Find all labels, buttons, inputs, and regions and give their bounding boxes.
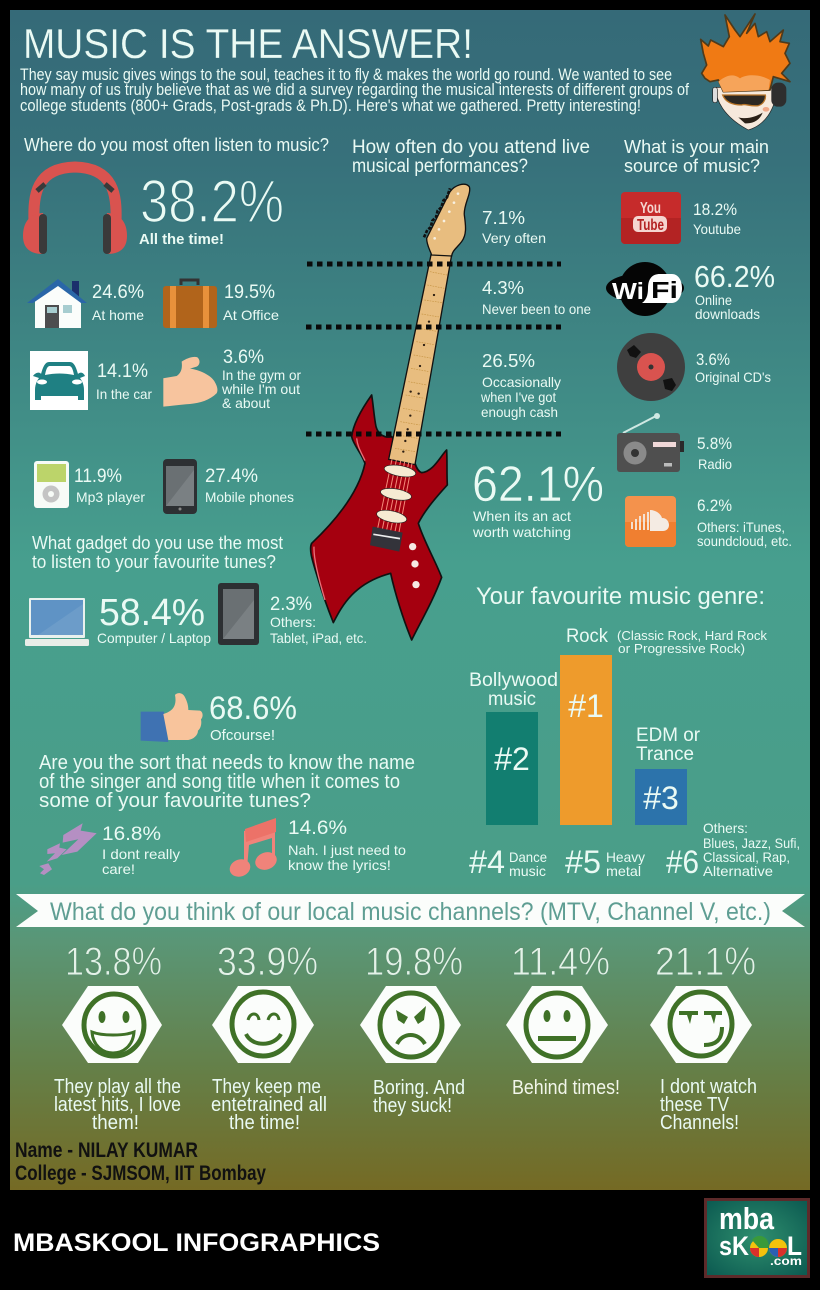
stat: youtube: 18.2% — [693, 200, 737, 219]
stat: original cds: Original CD's — [695, 369, 771, 385]
stat: very often: Very often — [482, 230, 546, 246]
caption: play latest hits: latest hits, I love — [54, 1094, 181, 1116]
bar: rock #1: Rock — [566, 626, 608, 647]
icon: happy face in hexagon — [212, 986, 314, 1063]
bar chart: genres — [469, 626, 767, 825]
stat: mobile phones — [205, 466, 294, 505]
icon: briefcase — [163, 280, 217, 328]
bar: rock #1: #1 — [568, 688, 604, 724]
bar: bollywood #2: music — [488, 689, 536, 710]
stat: don't care: 16.8% — [102, 824, 161, 845]
heading: singer and song question — [39, 752, 415, 812]
stat: worth watching: When its an act — [473, 508, 571, 524]
stat: original cds: 3.6% — [696, 350, 730, 369]
stat: very often: 7.1% — [482, 208, 525, 228]
percentages row: 33.9% — [217, 940, 318, 984]
icon: flame-haired character with headphones — [701, 14, 790, 130]
stat: don't care: I dont really — [102, 846, 180, 862]
caption: behind times: Behind times! — [512, 1077, 620, 1099]
genre #5 heavy metal: metal — [606, 863, 641, 879]
title: MUSIC IS THE ANSWER! — [23, 20, 473, 67]
icon: smirking face in hexagon — [650, 986, 752, 1063]
stat: at office — [223, 282, 279, 323]
icon: radio — [617, 413, 684, 472]
genre #6 others: Blues, Jazz, Sufi, — [703, 835, 800, 851]
stat: just lyrics — [288, 818, 406, 873]
caption: play latest hits — [54, 1076, 181, 1134]
stat: others itunes: soundcloud, etc. — [697, 533, 792, 549]
stat: occasionally — [480, 351, 561, 420]
stat: radio: Radio — [698, 456, 732, 472]
icon: neutral face in hexagon — [506, 986, 608, 1063]
icon: tablet — [218, 583, 259, 645]
caption: don't watch: Channels! — [660, 1112, 739, 1134]
heading: gadget: What gadget do you use the most — [32, 533, 283, 553]
genre #6 others — [666, 820, 800, 880]
caption: keep me entertained: They keep me — [212, 1076, 321, 1098]
stat: of course: 68.6% — [209, 690, 297, 726]
stat: others tablet: 2.3% — [270, 594, 312, 615]
stat: worth watching: 62.1% — [472, 456, 604, 512]
logo: mbaskool: .com — [770, 1254, 802, 1268]
icon: vinyl record — [617, 333, 685, 401]
icon: soundcloud — [625, 496, 676, 547]
stat: mobile phones: 27.4% — [205, 466, 258, 487]
stat: don't care: care! — [102, 861, 135, 877]
guitar headstock — [427, 184, 470, 256]
icon: sleeping zzz — [39, 823, 97, 875]
stat: never been — [482, 278, 591, 317]
stat: online downloads: downloads — [695, 306, 760, 322]
genre #6 others: Others: — [703, 820, 748, 836]
genre #6 others: Classical, Rap, — [703, 849, 790, 865]
icon: angry face in hexagon — [360, 986, 461, 1063]
stat: in the car: 14.1% — [97, 361, 148, 382]
genre #4 dance: Dance — [509, 849, 547, 865]
stat: all the time: All the time! — [139, 231, 224, 248]
stat: mp3 player: Mp3 player — [76, 489, 145, 505]
stat: online downloads — [694, 259, 775, 322]
caption: boring — [373, 1077, 465, 1117]
icon: youtube: You — [640, 200, 661, 217]
stat: at office: 19.5% — [224, 282, 275, 303]
genre #5 heavy metal: Heavy — [606, 849, 645, 865]
icon: thumbs up — [141, 693, 203, 742]
stat: all the time: 38.2% — [140, 168, 284, 235]
stat: worth watching: worth watching — [472, 524, 571, 540]
icon: laptop — [25, 598, 89, 646]
stat: gym: while I'm out — [221, 381, 300, 397]
stat: gym: & about — [222, 395, 270, 411]
stat: very often — [482, 208, 546, 246]
stat: radio — [697, 434, 732, 472]
stat: mp3 player: 11.9% — [74, 466, 122, 487]
stat: occasionally: when I've got — [480, 389, 556, 405]
credit: author — [15, 1139, 266, 1185]
icon: wifi — [606, 262, 684, 316]
bar: edm #3 — [635, 725, 701, 825]
stat: computer laptop: Computer / Laptop — [97, 630, 211, 646]
bar: bollywood #2: Bollywood — [469, 670, 558, 691]
stat: others itunes: 6.2% — [697, 496, 732, 515]
icon: mobile phone — [163, 459, 197, 514]
intro text — [20, 65, 689, 115]
stat: at home — [92, 282, 144, 323]
stat: of course: Ofcourse! — [210, 727, 275, 744]
logo: mbaskool: L — [787, 1231, 802, 1261]
stat: original cds — [695, 350, 771, 385]
icon: headphones — [23, 167, 127, 254]
icon: wifi: Fi — [651, 277, 678, 303]
stat: occasionally: 26.5% — [482, 351, 535, 371]
percentages row: 13.8% — [65, 940, 162, 984]
stat: others itunes — [697, 496, 792, 549]
heading: favourite genre: Your favourite music genre: — [476, 583, 765, 610]
icon: mp3 player — [34, 461, 69, 508]
guitar pickups — [375, 463, 417, 525]
heading: source of music: What is your main — [624, 137, 769, 157]
heading: where do you listen: Where do you most often listen to music? — [24, 135, 329, 155]
caption: boring: Boring. And — [373, 1077, 465, 1099]
stat: online downloads: Online — [695, 292, 732, 308]
stat: others tablet: Tablet, iPad, etc. — [270, 630, 367, 646]
stat: youtube — [693, 200, 741, 237]
percentages row: 21.1% — [655, 940, 756, 984]
stat: youtube: Youtube — [693, 221, 741, 237]
dotted dividers — [306, 264, 561, 434]
guitar neck — [389, 253, 452, 465]
stat: occasionally: Occasionally — [482, 374, 561, 390]
guitar knobs — [409, 543, 420, 588]
stat: just lyrics: know the lyrics! — [288, 857, 391, 873]
stat: of course — [209, 690, 297, 744]
credit: author: College - SJMSOM, IIT Bombay — [15, 1162, 266, 1185]
stat: at home: 24.6% — [92, 282, 144, 303]
stat: don't care — [102, 824, 180, 877]
caption: play latest hits: They play all the — [54, 1076, 181, 1098]
icon: youtube — [621, 192, 681, 244]
heading: live performances: musical performances? — [352, 156, 528, 177]
percentages row: 11.4% — [511, 940, 610, 984]
intro text: college students (800+ Grads, Post-grads & Ph.D). Here's what we gathered. Pretty interesting! — [20, 96, 641, 115]
stat: never been: 4.3% — [482, 278, 524, 298]
caption: keep me entertained: the time! — [229, 1112, 300, 1134]
genre #4 dance — [469, 844, 547, 880]
caption: don't watch — [660, 1076, 757, 1134]
bar: edm #3: EDM or — [636, 725, 701, 746]
genre #4 dance: music — [509, 863, 546, 879]
genre #5 heavy metal — [565, 844, 645, 880]
guitar bridge — [370, 527, 403, 552]
stat: at home: At home — [92, 307, 144, 323]
caption: don't watch: these TV — [660, 1094, 730, 1116]
banner: local music channels: What do you think of our local music channels? (MTV, Channel V, etc.) — [50, 898, 771, 926]
intro text: They say music gives wings to the soul, teaches it to fly & makes the world go round. We wanted to see — [20, 65, 672, 84]
heading: live performances — [352, 137, 590, 177]
footer title: MBASKOOL INFOGRAPHICS — [13, 1229, 380, 1257]
bar: bollywood #2 — [469, 670, 558, 825]
icon: wifi: Wi — [612, 278, 644, 304]
intro text: how many of us truly believe that as we did a survey regarding the musical interests of different groups of — [20, 80, 689, 99]
heading: source of music — [624, 137, 769, 176]
stat: just lyrics: Nah. I just need to — [288, 842, 406, 858]
icon: house — [27, 279, 87, 328]
genre #5 heavy metal: #5 — [565, 844, 601, 880]
guitar strings — [377, 459, 412, 534]
logo: mbaskool: sK — [719, 1231, 749, 1261]
caption: keep me entertained — [211, 1076, 327, 1134]
heading: gadget: to listen to your favourite tunes? — [32, 552, 276, 572]
caption: play latest hits: them! — [92, 1112, 139, 1134]
credit: author: Name - NILAY KUMAR — [15, 1139, 198, 1162]
bar: rock #1: (Classic Rock, Hard Rock — [617, 628, 767, 643]
stat: others tablet — [270, 594, 367, 646]
stat: gym: 3.6% — [223, 347, 264, 368]
caption: boring: they suck! — [373, 1095, 452, 1117]
icon: flexed arm — [163, 357, 217, 407]
heading: singer and song question: some of your favourite tunes? — [39, 790, 311, 812]
genre #6 others: Alternative — [703, 863, 773, 879]
bar: edm #3: Trance — [636, 744, 694, 765]
stat: in the car: In the car — [96, 386, 152, 402]
stat: in the car — [96, 361, 152, 402]
genre #6 others: #6 — [666, 844, 699, 880]
heading: singer and song question: of the singer and song title when it comes to — [39, 771, 400, 793]
bar: bollywood #2: #2 — [494, 741, 530, 777]
caption: don't watch: I dont watch — [660, 1076, 757, 1098]
genre #4 dance: #4 — [469, 844, 505, 880]
stat: worth watching — [472, 456, 604, 540]
stat: at office: At Office — [223, 307, 279, 323]
stat: gym — [221, 347, 301, 411]
heading: gadget — [32, 533, 283, 572]
bar: edm #3: #3 — [643, 780, 679, 816]
caption: keep me entertained: entetrained all — [211, 1094, 327, 1116]
heading: source of music: source of music? — [624, 156, 760, 176]
stat: mp3 player — [74, 466, 145, 505]
stat: never been: Never been to one — [482, 301, 591, 317]
stat: radio: 5.8% — [697, 434, 732, 453]
stat: computer laptop: 58.4% — [99, 592, 205, 634]
percentages row — [65, 940, 756, 984]
stat: mobile phones: Mobile phones — [205, 489, 294, 505]
stat: occasionally: enough cash — [481, 404, 558, 420]
stat: just lyrics: 14.6% — [288, 818, 347, 839]
stat: online downloads: 66.2% — [694, 259, 775, 294]
logo: mbaskool: mba — [719, 1201, 775, 1236]
icon: music note — [227, 818, 279, 880]
percentages row: 19.8% — [365, 940, 463, 984]
heading: live performances: How often do you attend live — [352, 137, 590, 158]
stat: gym: In the gym or — [222, 367, 301, 383]
stat: others itunes: Others: iTunes, — [697, 519, 785, 535]
heading: singer and song question: Are you the sort that needs to know the name — [39, 752, 415, 774]
stat: others tablet: Others: — [270, 614, 316, 630]
bar: rock #1 — [560, 626, 767, 825]
logo: mbaskool — [706, 1200, 808, 1276]
icon: laughing face in hexagon — [62, 986, 162, 1063]
guitar body — [311, 395, 447, 640]
icon: youtube: Tube — [637, 217, 664, 234]
bar: rock #1: or Progressive Rock) — [618, 641, 745, 656]
icon: electric guitar — [311, 184, 470, 640]
icon: car — [30, 351, 88, 410]
